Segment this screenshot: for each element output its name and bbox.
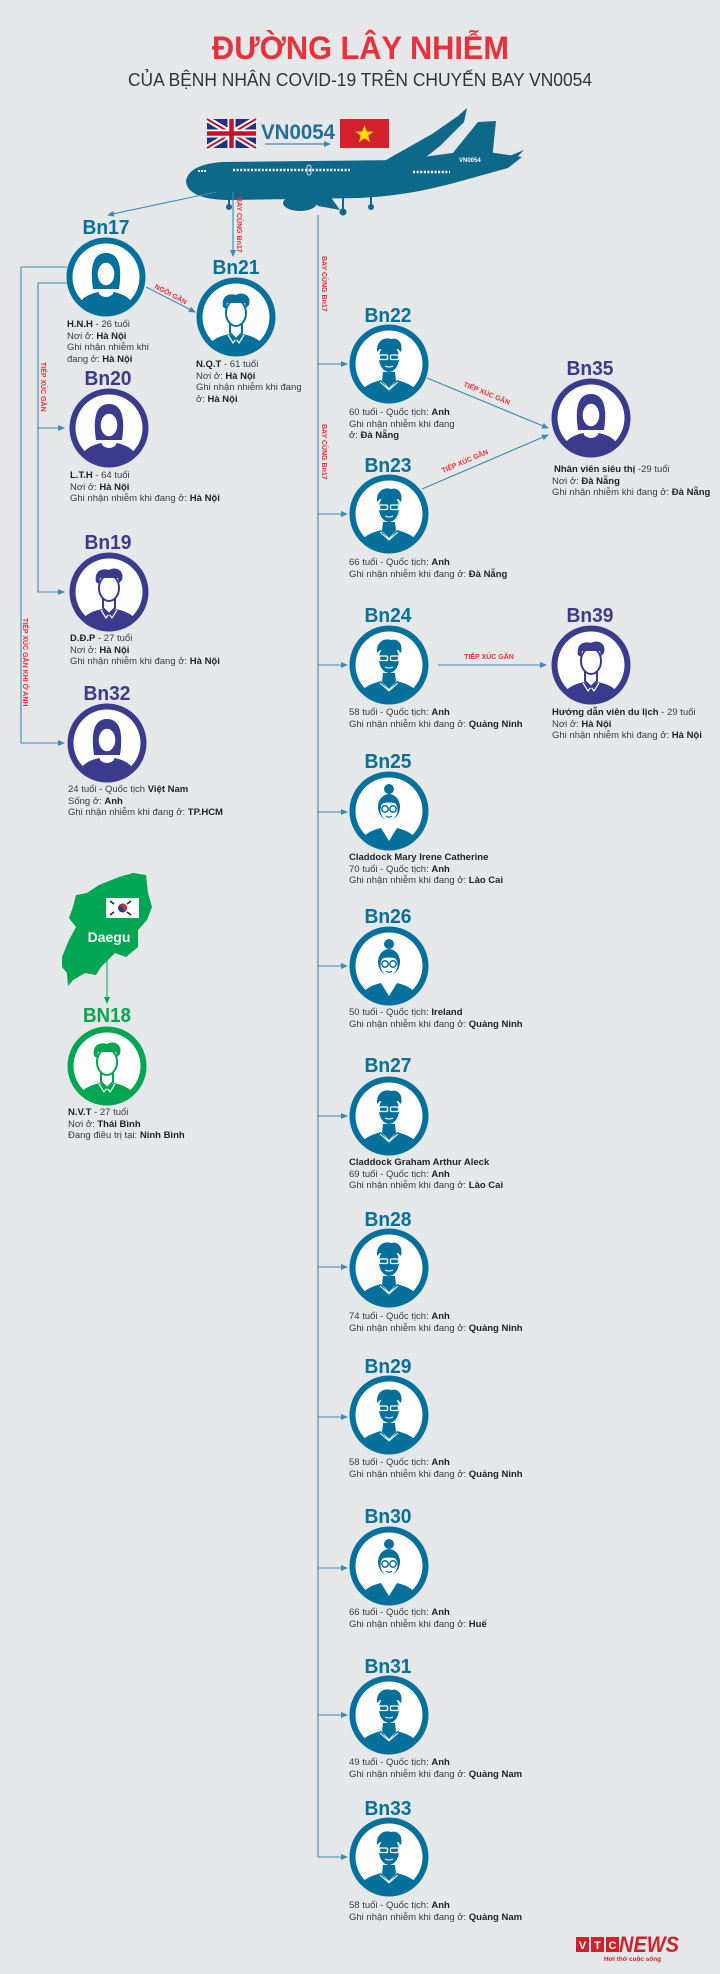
label: bay cùng Bn17 (Bn21): BAY CÙNG Bn17 (235, 197, 244, 253)
arrow: Bn24 to Bn39 (438, 664, 546, 666)
node: Bn25: Bn25 (364, 751, 412, 773)
node: Bn35: Ghi nhận nhiễm khi đang ở: Đà Nẵng (552, 486, 711, 498)
node: Bn19: Nơi ở: Hà Nội (70, 645, 129, 656)
node: BN18 (68, 1005, 185, 1141)
label: ngồi gần: NGỒI GẦN (153, 281, 189, 306)
node: Bn17: đang ở: Hà Nội (67, 354, 132, 365)
node: Bn21: Ghi nhận nhiễm khi đang (196, 382, 302, 393)
node: Bn26 (349, 906, 523, 1030)
node: Bn24: Bn24 (364, 605, 412, 627)
node: Bn21 (196, 257, 302, 405)
logo: VTC News: NEWS (619, 1932, 679, 1957)
node: Bn27: Bn27 (364, 1055, 412, 1077)
node: Bn25: 70 tuổi - Quốc tịch: Anh (349, 864, 450, 875)
node: Bn30: Ghi nhận nhiễm khi đang ở: Huế (349, 1619, 487, 1630)
node: Bn33: Ghi nhận nhiễm khi đang ở: Quảng Nam (349, 1912, 522, 1923)
logo: VTC News: Hơi thở cuộc sống (604, 1956, 661, 1963)
node: BN18: BN18 (83, 1005, 131, 1027)
node: Bn27 (349, 1055, 503, 1191)
node: Bn17: Bn17 (82, 217, 130, 239)
node: Bn22: ở: Đà Nẵng (349, 429, 399, 441)
node: Bn28: 74 tuổi - Quốc tịch: Anh (349, 1311, 450, 1322)
node: Bn27: Ghi nhận nhiễm khi đang ở: Lào Cai (349, 1180, 503, 1191)
node: BN18: Đang điều trị tại: Ninh Bình (68, 1130, 185, 1141)
icon: Vietnam flag (340, 119, 389, 148)
node: Bn17 (66, 217, 149, 365)
node: Bn27: 69 tuổi - Quốc tịch: Anh (349, 1169, 450, 1180)
node: Bn26: Ghi nhận nhiễm khi đang ở: Quảng Ninh (349, 1019, 523, 1030)
node: Bn35: Nơi ở: Đà Nẵng (552, 475, 620, 487)
node: Bn21: Nơi ở: Hà Nội (196, 371, 255, 382)
node: Bn32: 24 tuổi - Quốc tịch Việt Nam (68, 784, 188, 795)
node: Bn35 (552, 358, 711, 498)
arrow: plane to Bn21 (232, 192, 234, 256)
node: Bn28: Ghi nhận nhiễm khi đang ở: Quảng Ninh (349, 1323, 523, 1334)
label: bay cùng Bn17 (trunk 1): BAY CÙNG Bn17 (320, 256, 329, 312)
branch arrows from trunk (318, 364, 347, 1857)
node: Bn22: Bn22 (364, 305, 412, 327)
node: Bn25 (349, 751, 503, 886)
node: Bn19: Bn19 (84, 532, 132, 554)
node: Bn30: 66 tuổi - Quốc tịch: Anh (349, 1607, 450, 1618)
node: Bn23 (349, 455, 508, 580)
arrow: Bn17 to Bn21 (146, 287, 195, 312)
node: Bn29: Ghi nhận nhiễm khi đang ở: Quảng Ninh (349, 1469, 523, 1480)
node: Bn33: Bn33 (364, 1798, 412, 1820)
node: Bn35: Bn35 (566, 358, 614, 380)
node: Bn31: Bn31 (364, 1656, 412, 1678)
node: Bn26: 50 tuổi - Quốc tịch: Ireland (349, 1007, 463, 1018)
node: Bn25: Ghi nhận nhiễm khi đang ở: Lào Cai (349, 875, 503, 886)
node: Bn39: Ghi nhận nhiễm khi đang ở: Hà Nội (552, 730, 702, 741)
node: Bn24: 58 tuổi - Quốc tịch: Anh (349, 707, 450, 718)
node: Bn30 (349, 1506, 487, 1630)
node: Bn32: Ghi nhận nhiễm khi đang ở: TP.HCM (68, 807, 223, 818)
node: Bn33 (349, 1798, 522, 1923)
logo: VTC News: T (594, 1940, 601, 1952)
node: Bn31: 49 tuổi - Quốc tịch: Anh (349, 1757, 450, 1768)
node: Bn19 (70, 532, 220, 667)
main trunk line (317, 215, 319, 1857)
node: Bn28 (349, 1209, 523, 1334)
icon: airplane (186, 108, 524, 216)
node: Bn27: Claddock Graham Arthur Aleck (349, 1157, 490, 1168)
node: Bn20: Bn20 (84, 368, 132, 390)
left connector lines (21, 267, 67, 743)
node: Bn39: Bn39 (566, 605, 614, 627)
subtitle: CỦA BỆNH NHÂN COVID-19 TRÊN CHUYẾN BAY VN0054 (128, 69, 592, 90)
node: Bn23: Bn23 (364, 455, 412, 477)
node: Bn20: L.T.H - 64 tuổi (70, 470, 130, 481)
node: Bn21: Bn21 (212, 257, 260, 279)
node: Bn20: Nơi ở: Hà Nội (70, 482, 129, 493)
node: Bn26: Bn26 (364, 906, 412, 928)
label: tiếp xúc gần (left inner): TIẾP XÚC GẦN (39, 362, 49, 412)
node: Bn23: Ghi nhận nhiễm khi đang ở: Đà Nẵng (349, 568, 508, 580)
node: Bn17: Nơi ở: Hà Nội (67, 331, 126, 342)
node: Bn31: Ghi nhận nhiễm khi đang ở: Quảng Nam (349, 1769, 522, 1780)
node: Bn32 (68, 683, 223, 818)
node: Bn31 (349, 1656, 522, 1780)
node: Bn24 (349, 605, 523, 730)
arrow: Bn22 to Bn35 (427, 378, 548, 428)
node: Bn32: Bn32 (84, 683, 130, 705)
node: Bn22: Ghi nhận nhiễm khi đang (349, 419, 455, 430)
node: Bn30: Bn30 (364, 1506, 412, 1528)
node: Bn20 (70, 368, 220, 504)
node: Bn22: 60 tuổi - Quốc tịch: Anh (349, 407, 450, 418)
node: Bn39: Nơi ở: Hà Nội (552, 719, 611, 730)
node: Bn17: H.N.H - 26 tuổi (67, 319, 130, 330)
logo: VTC News: C (609, 1940, 617, 1952)
label: tiếp xúc gần (Bn23): TIẾP XÚC GẦN (440, 446, 489, 475)
node: Bn33: 58 tuổi - Quốc tịch: Anh (349, 1900, 450, 1911)
node: Bn22 (349, 305, 455, 441)
node: Bn20: Ghi nhận nhiễm khi đang ở: Hà Nội (70, 493, 220, 504)
node: Bn29 (349, 1356, 523, 1480)
icon: UK flag (207, 119, 256, 148)
arrow: Bn23 to Bn35 (422, 435, 548, 489)
title: ĐƯỜNG LÂY NHIỄM (212, 30, 509, 66)
flight header: UK flag, VN0054, VN flag (207, 119, 389, 148)
label: tiếp xúc gần khi ở Anh: TIẾP XÚC GẦN KHI Ở ANH (21, 618, 31, 706)
node: Bn32: Sống ở: Anh (68, 796, 123, 807)
node: Bn19: D.Đ.P - 27 tuổi (70, 633, 132, 644)
arrow: flight direction (265, 143, 330, 145)
node: Bn19: Ghi nhận nhiễm khi đang ở: Hà Nội (70, 656, 220, 667)
arrow: plane to Bn17 (108, 192, 216, 215)
node: Bn39: Hướng dẫn viên du lịch - 29 tuổi (552, 707, 696, 718)
icon: Korea flag (106, 898, 139, 918)
node: Bn23: 66 tuổi - Quốc tịch: Anh (349, 557, 450, 568)
map: Daegu (62, 873, 152, 986)
node: Bn21: N.Q.T - 61 tuổi (196, 359, 258, 370)
node: Bn28: Bn28 (364, 1209, 412, 1231)
node: Bn25: Claddock Mary Irene Catherine (349, 852, 488, 863)
label: tiếp xúc gần (Bn24): TIẾP XÚC GẦN (464, 651, 514, 661)
label: bay cùng Bn17 (trunk 2): BAY CÙNG Bn17 (320, 424, 329, 480)
node: Bn35: Nhân viên siêu thị -29 tuổi (554, 464, 670, 475)
node: Bn24: Ghi nhận nhiễm khi đang ở: Quảng Ninh (349, 719, 523, 730)
node: BN18: N.V.T - 27 tuổi (68, 1107, 128, 1118)
logo: VTC News: V (579, 1940, 587, 1952)
node: Bn21: ở: Hà Nội (196, 394, 238, 405)
map: Daegu: Daegu (88, 929, 130, 945)
icon: airplane: VN0054 (459, 158, 481, 164)
flight code: VN0054 (261, 121, 335, 144)
node: Bn17: Ghi nhận nhiễm khi (67, 342, 149, 353)
logo: VTC News (576, 1932, 679, 1963)
label: tiếp xúc gần (Bn22): TIẾP XÚC GẦN (462, 379, 512, 407)
node: Bn29: 58 tuổi - Quốc tịch: Anh (349, 1457, 450, 1468)
arrow: Daegu to BN18 (106, 955, 108, 1003)
node: Bn39 (552, 605, 702, 741)
node: BN18: Nơi ở: Thái Bình (68, 1119, 141, 1130)
node: Bn29: Bn29 (364, 1356, 412, 1378)
